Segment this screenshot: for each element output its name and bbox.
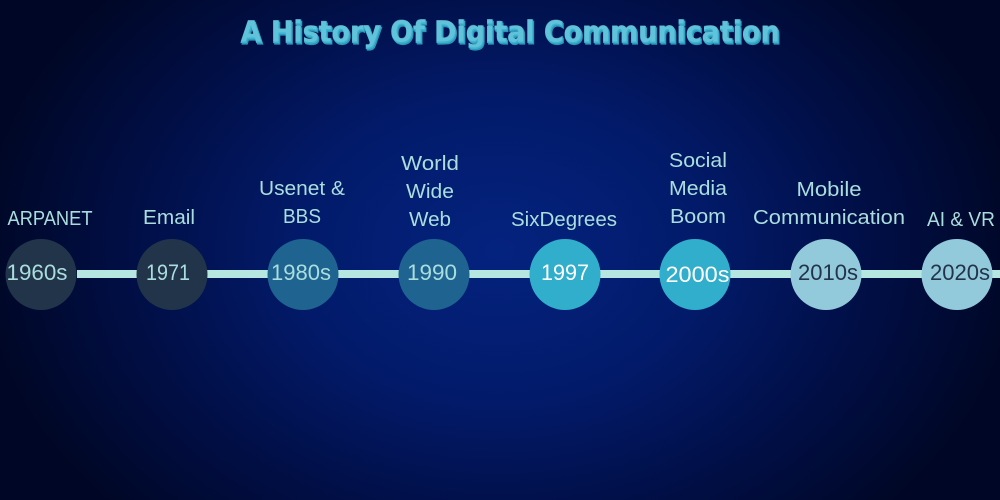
milestone: 1997 SixDegrees: 1997 xyxy=(541,260,589,285)
title: A History Of Digital Communication xyxy=(241,16,780,50)
milestone: 2000s Social Media Boom xyxy=(660,150,730,310)
milestone: 2010s Mobile Communication: 2010s xyxy=(798,260,858,285)
milestone: 1980s Usenet & BBS: BBS xyxy=(283,206,321,228)
milestone: 1990 World Wide Web: World xyxy=(401,153,459,175)
milestone: 1980s Usenet & BBS: Usenet & xyxy=(259,178,346,200)
milestone: 1971 Email: 1971 xyxy=(146,260,190,285)
milestone: 2000s Social Media Boom: Media xyxy=(669,178,728,200)
title: A History Of Digital Communication xyxy=(242,17,781,51)
milestone: 2020s AI & VR: 2020s xyxy=(930,260,990,285)
milestone: 1990 World Wide Web xyxy=(398,153,470,310)
milestone: 1971 Email xyxy=(136,207,208,310)
milestone: 1997 SixDegrees xyxy=(511,209,617,310)
milestone: 1980s Usenet & BBS xyxy=(259,178,346,310)
milestone: 1990 World Wide Web: Web xyxy=(409,209,451,231)
milestone: 2010s Mobile Communication xyxy=(753,179,905,310)
milestone: 2020s AI & VR: AI & VR xyxy=(927,209,995,231)
milestone: 2010s Mobile Communication: Communication xyxy=(753,207,905,229)
milestone: 1980s Usenet & BBS: 1980s xyxy=(271,260,331,285)
milestone: 2000s Social Media Boom: Boom xyxy=(670,206,726,228)
milestone: 1960s ARPANET xyxy=(6,208,92,310)
milestone: 2000s Social Media Boom: 2000s xyxy=(666,262,730,287)
milestone: 2000s Social Media Boom: Social xyxy=(669,150,727,172)
milestone: 1990 World Wide Web: Wide xyxy=(406,181,454,203)
milestone: 1990 World Wide Web: 1990 xyxy=(407,260,457,285)
milestone: 1997 SixDegrees: SixDegrees xyxy=(511,209,617,231)
milestone: 2010s Mobile Communication: Mobile xyxy=(796,179,862,201)
milestone: 1960s ARPANET: 1960s xyxy=(6,260,68,285)
milestone: 2020s AI & VR xyxy=(922,209,995,310)
timeline line xyxy=(77,270,1000,278)
milestone: 1960s ARPANET: ARPANET xyxy=(8,208,92,230)
title: A History Of Digital Communication xyxy=(240,14,780,48)
milestone: 1971 Email: Email xyxy=(143,207,195,229)
